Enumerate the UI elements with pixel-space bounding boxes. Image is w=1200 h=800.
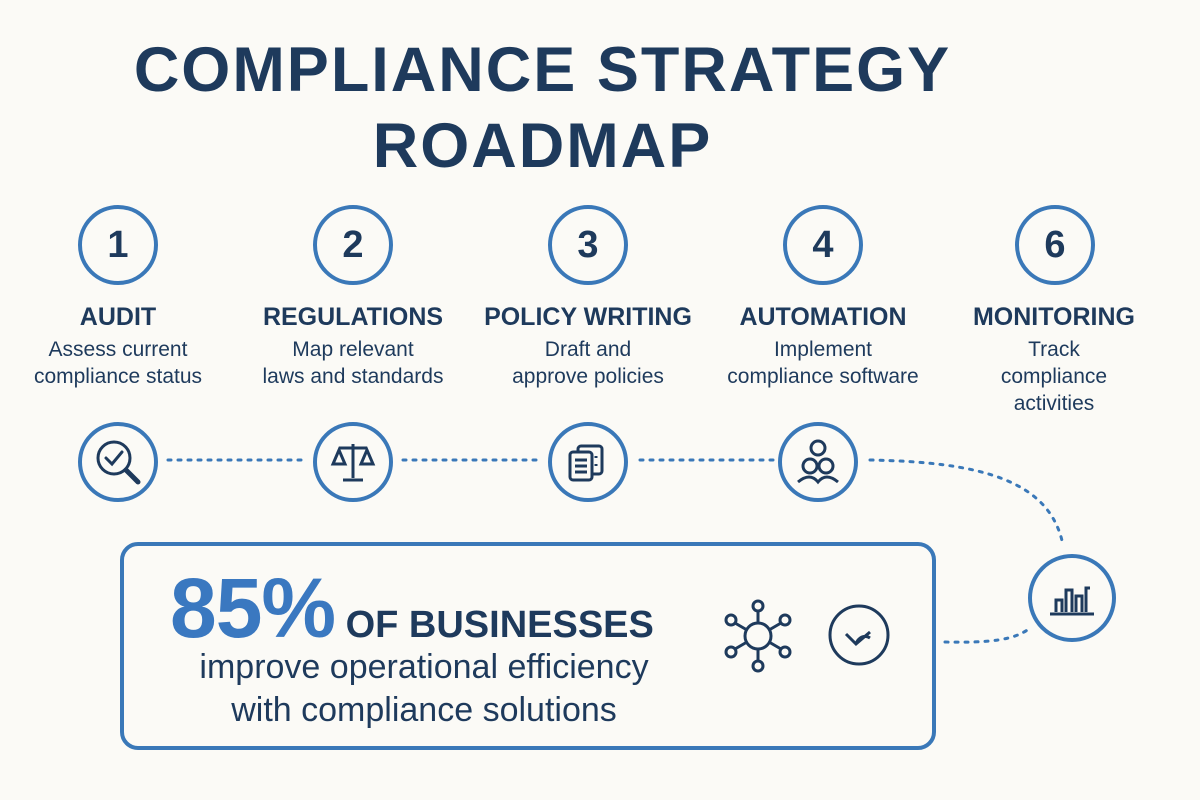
step 3 text: Draft and [545, 338, 631, 361]
step 1 text: compliance status [34, 365, 202, 388]
step 2 text: REGULATIONS [263, 303, 443, 331]
step 6 text: Track [1028, 338, 1080, 361]
step 1 text: Assess current [49, 338, 187, 361]
number 1 [78, 205, 158, 285]
step 2 [263, 205, 443, 388]
step 3 text: POLICY WRITING [484, 303, 692, 331]
title [134, 35, 951, 181]
step 4 text: AUTOMATION [739, 303, 907, 331]
number 4 [783, 205, 863, 285]
icon: bar chart [1028, 554, 1116, 642]
step 3 text: approve policies [512, 365, 664, 388]
callout text: improve operational efficiency [199, 648, 649, 686]
number 4: 4 [812, 224, 834, 266]
number 6: 6 [1044, 224, 1066, 266]
number 1: 1 [107, 224, 129, 266]
number 2 [313, 205, 393, 285]
step 4 text [727, 303, 919, 388]
stat: 85% OF BUSINESSES [170, 561, 654, 655]
step 6 text [973, 303, 1135, 415]
number 6 [1015, 205, 1095, 285]
step 2 text [263, 303, 443, 388]
step 1 text: AUDIT [80, 303, 156, 331]
number 3 [548, 205, 628, 285]
number 2: 2 [342, 224, 364, 266]
icon: network [724, 600, 792, 672]
step 4 text: Implement [774, 338, 872, 361]
step 3 [484, 205, 692, 388]
step 2 text: Map relevant [292, 338, 414, 361]
step 4 text: compliance software [727, 365, 919, 388]
icon: documents [548, 422, 628, 502]
step 6 text: activities [1014, 392, 1094, 415]
step 2 text: laws and standards [263, 365, 443, 388]
step 6 [973, 205, 1135, 415]
callout [120, 542, 936, 750]
icon: people [778, 422, 858, 502]
title: ROADMAP [373, 111, 712, 181]
step 3 text [484, 303, 692, 388]
step 1 text [34, 303, 202, 388]
step 6 text: compliance [1001, 365, 1107, 388]
callout text: with compliance solutions [231, 691, 617, 729]
icon: magnifier check [78, 422, 158, 502]
step 6 text: MONITORING [973, 303, 1135, 331]
callout text [199, 648, 649, 729]
icon: scales [313, 422, 393, 502]
icon: check badge [828, 604, 890, 666]
step 1 [34, 205, 202, 388]
title: COMPLIANCE STRATEGY [134, 35, 951, 105]
step 4 [727, 205, 919, 388]
number 3: 3 [577, 224, 599, 266]
